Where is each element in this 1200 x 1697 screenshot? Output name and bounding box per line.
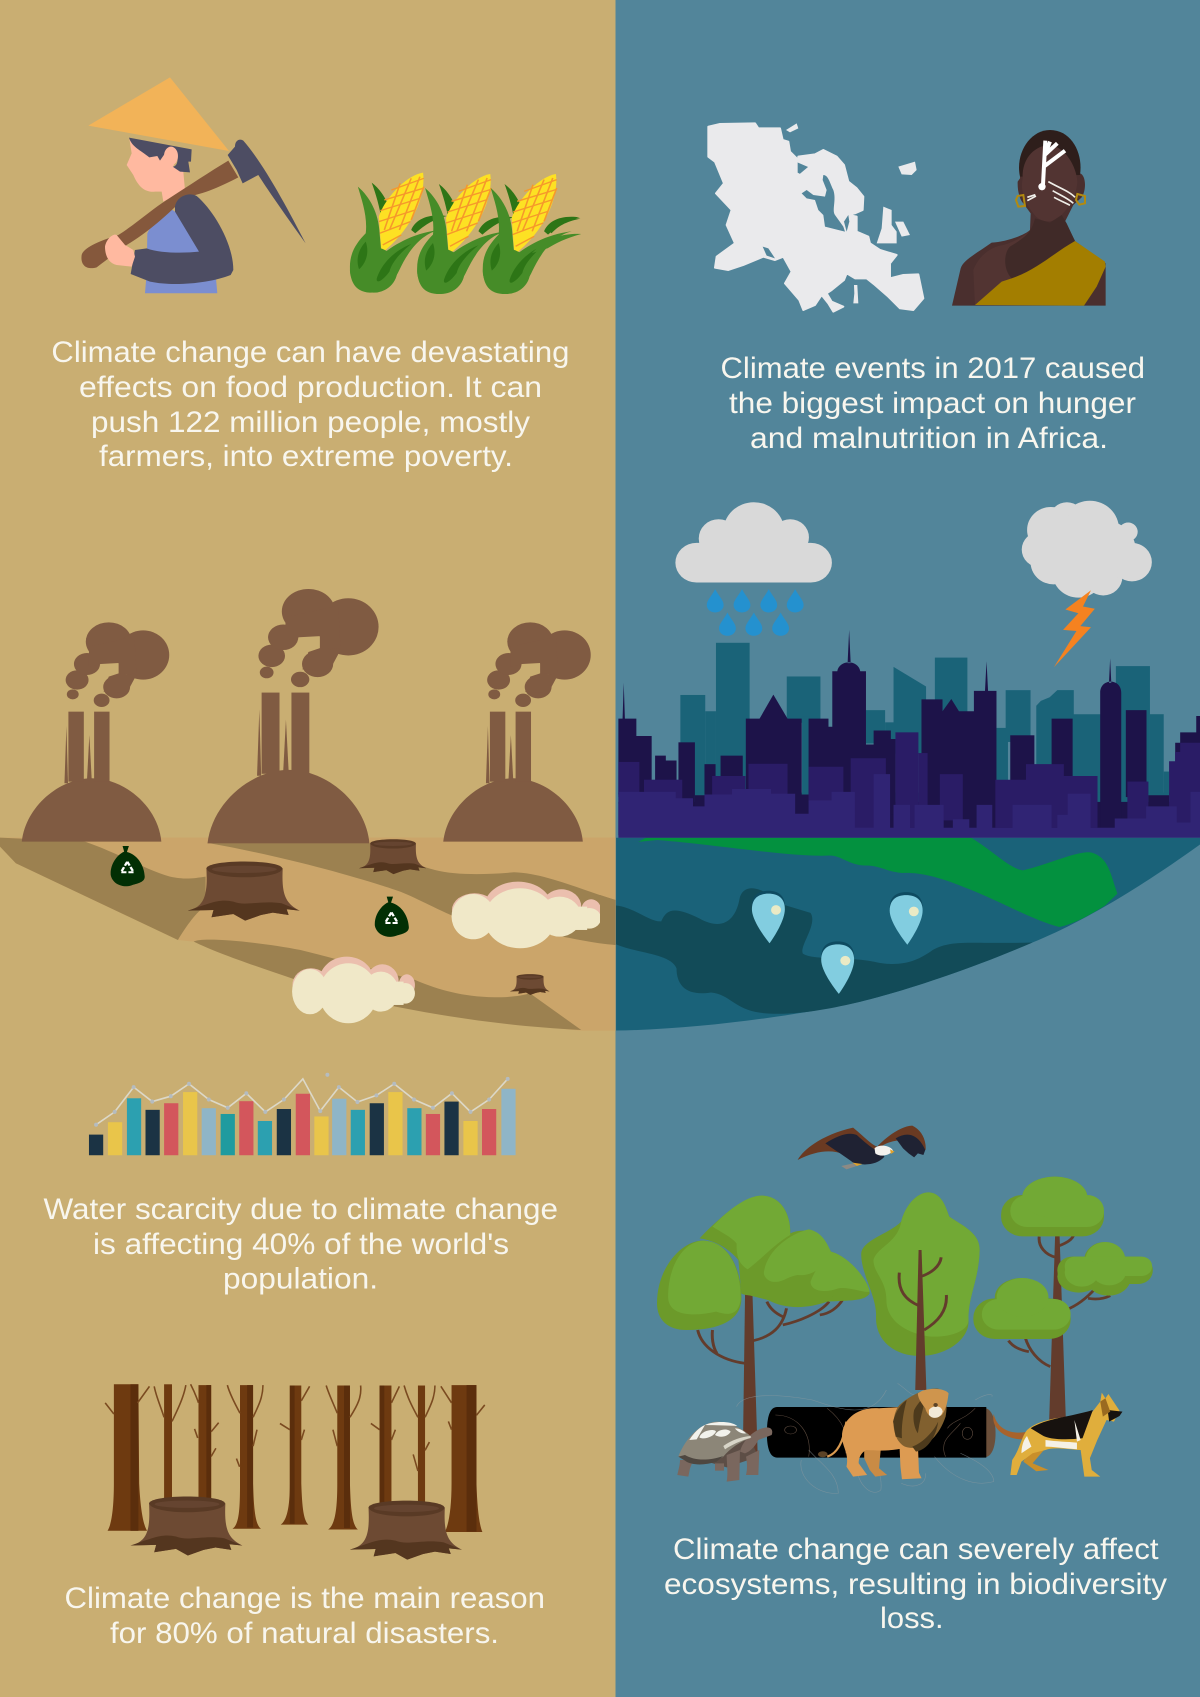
text: food production: push 122 million people, mostly — [91, 406, 530, 439]
text: ecosystems: ecosystems, resulting in biodiversity — [664, 1568, 1167, 1601]
illustration: right ground with land and water — [616, 838, 1200, 1031]
icon: African woman portrait — [952, 130, 1106, 306]
icon: black log — [737, 1383, 996, 1493]
illustration: bare tree trunks with stumps — [105, 1384, 485, 1560]
text: natural disasters: for 80% of natural disasters. — [110, 1617, 499, 1650]
icon: tree stumps on ground — [188, 839, 550, 995]
icon: cream clouds on ground — [292, 882, 601, 1023]
icon: factory left — [22, 622, 169, 842]
icon: location pins — [752, 891, 923, 994]
text: hunger in Africa — [720, 352, 1145, 455]
icon: factory right — [443, 622, 591, 842]
icon: right tree — [973, 1177, 1153, 1420]
icon: eagle — [798, 1126, 926, 1169]
text: hunger in Africa: Climate events in 2017 caused — [720, 352, 1145, 385]
text: food production: farmers, into extreme poverty. — [99, 440, 513, 473]
icon: row of corn plants — [350, 173, 581, 294]
text: natural disasters: Climate change is the main reason — [64, 1582, 545, 1615]
text: ecosystems: Climate change can severely affect — [673, 1533, 1159, 1566]
icon: rain cloud — [675, 502, 832, 636]
icon: storm cloud with lightning — [1022, 501, 1152, 667]
text: water scarcity: is affecting 40% of the world's — [93, 1228, 509, 1261]
icon: map silhouette — [708, 123, 923, 312]
icon: German shepherd dog — [993, 1393, 1122, 1477]
panel: blue right background — [616, 0, 1200, 1697]
text: natural disasters — [64, 1582, 545, 1650]
text: hunger in Africa: the biggest impact on hunger — [729, 387, 1136, 420]
icon: factory centre — [208, 589, 379, 843]
icon: lion — [818, 1388, 949, 1479]
text: ecosystems: loss. — [880, 1602, 944, 1635]
icon: left tree — [657, 1196, 870, 1453]
illustration: left ground with shadows — [0, 838, 616, 1031]
text: food production — [51, 336, 569, 473]
text: hunger in Africa: and malnutrition in Africa. — [750, 422, 1108, 455]
icon: recycling bags — [111, 846, 409, 937]
text: food production: effects on food production. It can — [79, 371, 542, 404]
shadow band crossing the divider — [600, 895, 616, 945]
text: water scarcity: population. — [223, 1262, 378, 1296]
panel: tan left background — [0, 0, 616, 1697]
illustration: city skyline — [618, 630, 1200, 838]
icon: middle tree — [861, 1192, 980, 1390]
bar chart with trend line — [89, 1073, 516, 1155]
icon: tortoise — [677, 1422, 772, 1482]
text: water scarcity: Water scarcity due to climate change — [44, 1193, 558, 1226]
icon: farmer with pickaxe — [81, 77, 306, 293]
text: water scarcity — [44, 1193, 558, 1296]
text: ecosystems — [664, 1533, 1167, 1635]
text: food production: Climate change can have devastating — [51, 336, 569, 369]
